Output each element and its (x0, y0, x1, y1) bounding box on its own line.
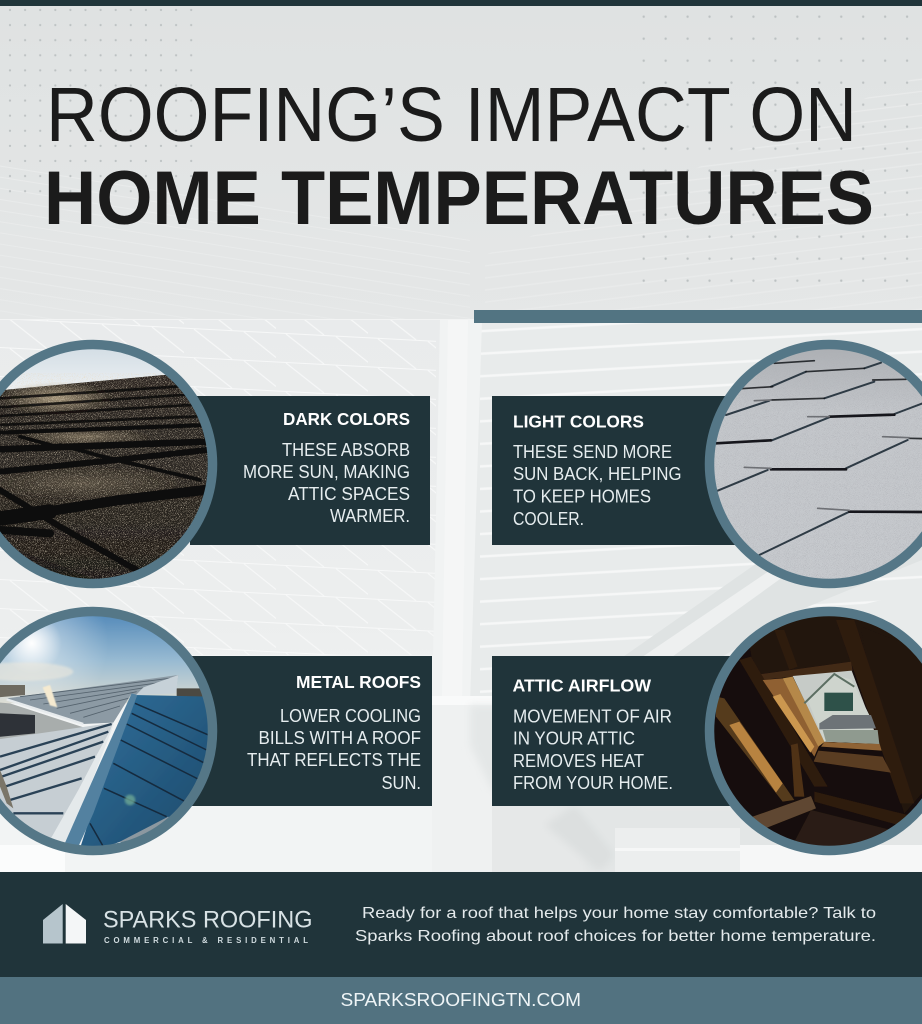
text: light colors description (513, 442, 682, 529)
website url: SPARKSROOFINGTN.COM (340, 990, 581, 1010)
text: metal roofs description: SUN. (382, 773, 421, 793)
text: light colors description: COOLER. (513, 509, 584, 529)
logo: company name: SPARKS ROOFING (103, 906, 312, 934)
ring (710, 344, 922, 584)
heading: light colors: LIGHT COLORS (513, 412, 644, 432)
footer panel (0, 872, 922, 977)
panel: dark colors (190, 396, 430, 545)
text: metal roofs description: LOWER COOLING (280, 706, 421, 726)
text: dark colors description: ATTIC SPACES (288, 484, 410, 504)
text: dark colors description: WARMER. (330, 506, 410, 526)
heading: dark colors: DARK COLORS (283, 409, 410, 429)
icon: light shingles photo circle (701, 337, 922, 590)
accent bar (474, 310, 922, 323)
text: dark colors description: THESE ABSORB (282, 440, 410, 460)
logo: tagline: COMMERCIAL & RESIDENTIAL (104, 936, 308, 945)
text: light colors description: THESE SEND MORE (513, 442, 672, 462)
text: light colors description: TO KEEP HOMES (513, 486, 651, 506)
background: faded roof photo (0, 319, 922, 872)
ring (0, 344, 212, 584)
top bar (0, 0, 922, 6)
text: attic airflow description (513, 706, 673, 793)
icon: metal roof photo circle (0, 606, 218, 856)
ring (710, 612, 922, 850)
text: attic airflow description: FROM YOUR HOME. (513, 773, 673, 793)
icon: attic window photo circle (701, 607, 922, 860)
text: dark colors description (243, 440, 410, 526)
ring (0, 612, 212, 850)
call to action text: Ready for a roof that helps your home stay comfortable? Talk to (362, 905, 876, 922)
heading: metal roofs: METAL ROOFS (296, 672, 421, 692)
text: metal roofs description (247, 706, 421, 793)
logo: house icon (43, 904, 86, 944)
text: light colors description: SUN BACK, HELPING (513, 464, 682, 484)
text: attic airflow description: MOVEMENT OF AIR (513, 706, 672, 726)
call to action text (355, 905, 876, 945)
title: HOME TEMPERATURES (44, 156, 874, 241)
panel: attic airflow (492, 656, 742, 806)
title: ROOFING’S IMPACT ON (46, 72, 857, 158)
title (44, 72, 874, 241)
call to action text: Sparks Roofing about roof choices for better home temperature. (355, 928, 876, 945)
dot grid: top left (8, 8, 194, 194)
heading: attic airflow: ATTIC AIRFLOW (512, 676, 651, 696)
panel: light colors (492, 396, 742, 545)
text: attic airflow description: REMOVES HEAT (513, 751, 644, 771)
text: metal roofs description: BILLS WITH A ROOF (258, 728, 421, 748)
text: attic airflow description: IN YOUR ATTIC (513, 728, 635, 748)
text: dark colors description: MORE SUN, MAKING (243, 462, 410, 482)
text: metal roofs description: THAT REFLECTS THE (247, 750, 421, 770)
website bar (0, 977, 922, 1024)
icon: dark shingles photo circle (0, 340, 218, 588)
panel: metal roofs (190, 656, 432, 806)
dot grid: top right (642, 15, 910, 283)
